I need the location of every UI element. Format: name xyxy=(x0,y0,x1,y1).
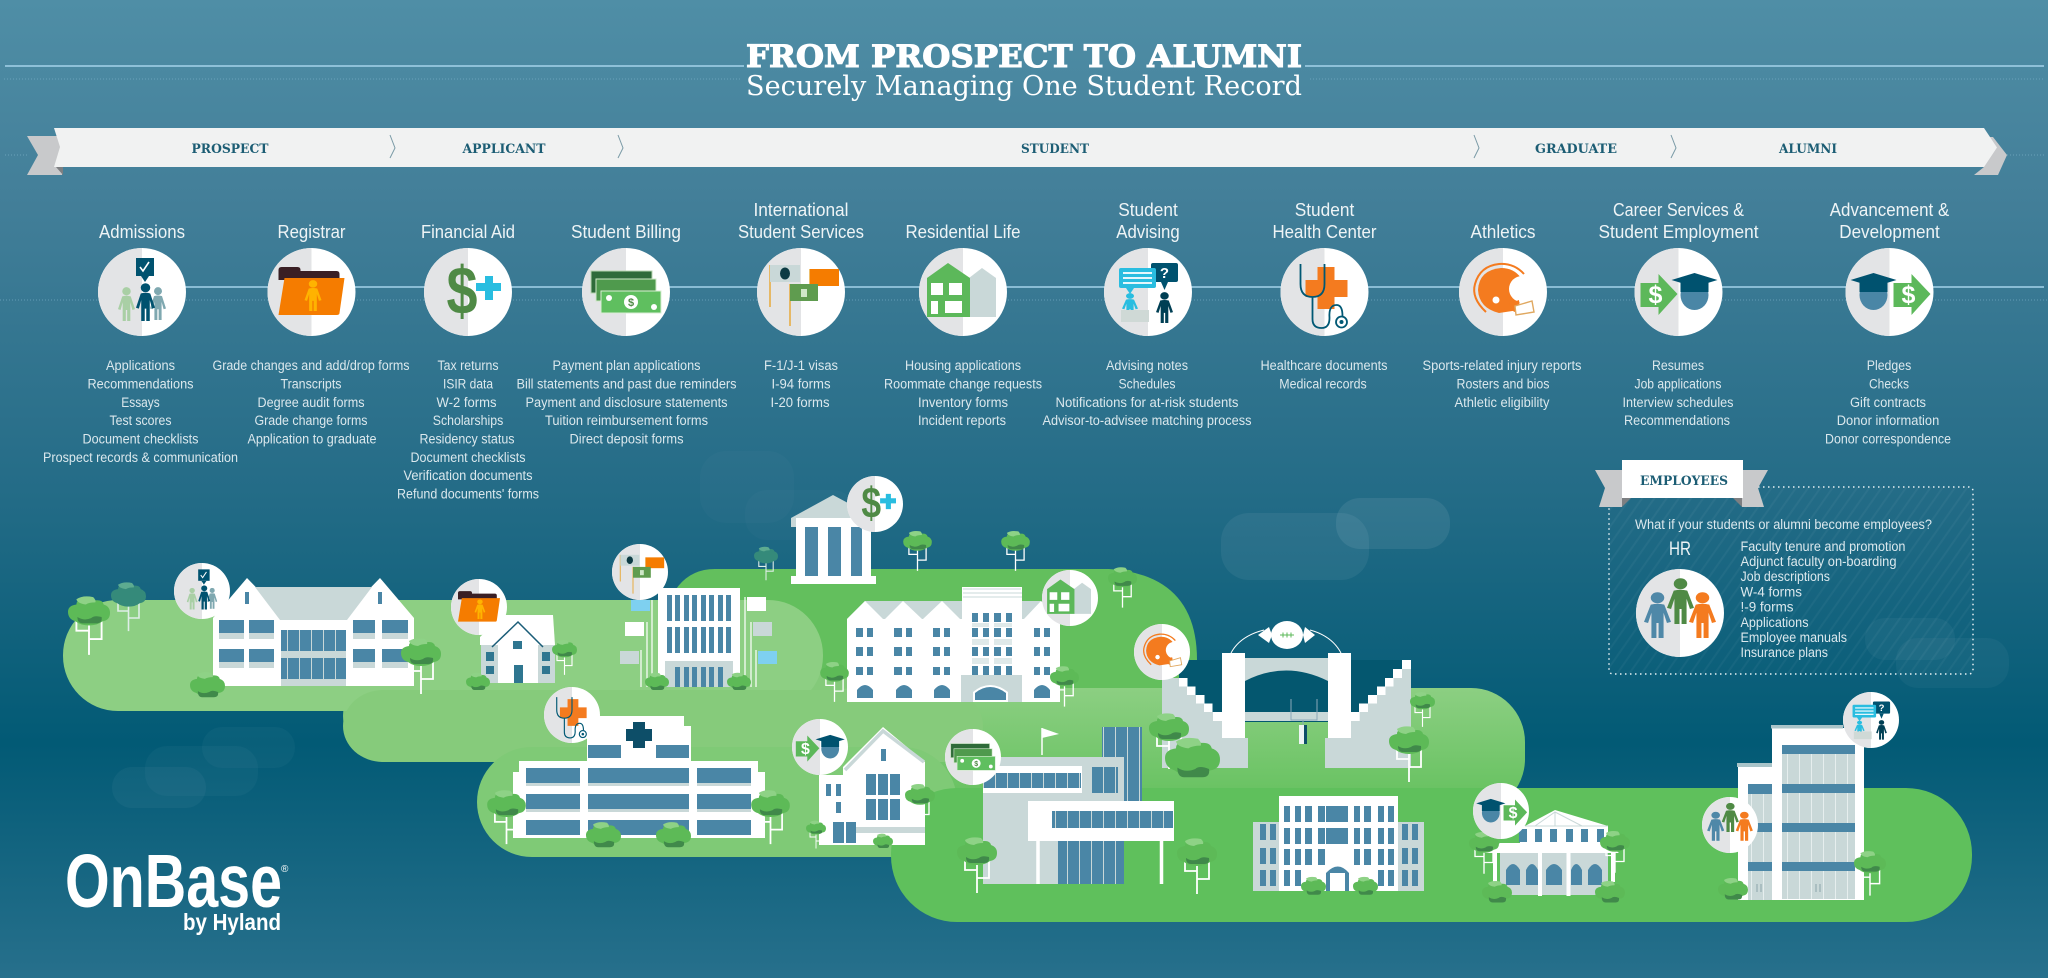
logo: ® xyxy=(281,864,289,875)
clouds xyxy=(112,451,2009,808)
column: Student Advising: Student xyxy=(1118,199,1178,220)
lifecycle ribbon: PROSPECT xyxy=(192,142,269,157)
column: Advancement and Development: Development xyxy=(1839,221,1940,242)
column: Advancement and Development: Checks xyxy=(1869,376,1909,392)
trees xyxy=(68,531,1886,902)
column: Student Health Center: Health Center xyxy=(1272,221,1376,242)
employees panel: W-4 forms xyxy=(1740,584,1802,600)
campus ground xyxy=(63,569,1972,922)
column: Financial Aid: Refund documents' forms xyxy=(397,486,539,502)
column: Financial Aid: Verification documents xyxy=(404,468,533,483)
column: Student Advising: Schedules xyxy=(1118,376,1176,392)
map marker: advancement xyxy=(1473,783,1529,839)
map marker: athletics xyxy=(1134,624,1190,680)
column: Financial Aid: Document checklists xyxy=(410,450,526,465)
building: residential halls xyxy=(847,587,1060,702)
column: Student Advising: Advising xyxy=(1116,221,1180,242)
column: Career Services and Student Employment: Career Services & xyxy=(1613,199,1745,220)
lifecycle ribbon: STUDENT xyxy=(1021,142,1089,157)
map marker: financial aid xyxy=(847,476,903,532)
column: Financial Aid: Residency status xyxy=(420,432,515,446)
column: Student Billing: Payment plan applications xyxy=(552,358,701,373)
column: Admissions: Document checklists xyxy=(82,432,199,446)
column: International Student Services xyxy=(738,199,864,410)
lifecycle ribbon: ALUMNI xyxy=(1778,142,1837,157)
column: Residential Life: Residential Life xyxy=(906,221,1020,242)
column: Registrar: Transcripts xyxy=(280,376,342,392)
column: Student Health Center: Student xyxy=(1295,199,1354,220)
title rules xyxy=(0,66,2048,300)
column: Student Advising xyxy=(1042,199,1252,428)
map marker: student advising xyxy=(1843,692,1899,748)
column: Student Billing: Bill statements and past due reminders xyxy=(516,376,737,392)
column: International Student Services: I-20 forms xyxy=(770,395,830,410)
title: FROM PROSPECT TO ALUMNI xyxy=(746,39,1302,75)
map marker: admissions xyxy=(174,563,230,619)
column: Advancement and Development: Gift contracts xyxy=(1850,395,1926,410)
column: Student Billing: Direct deposit forms xyxy=(570,432,684,446)
map marker: registrar xyxy=(451,579,507,635)
column: Athletics xyxy=(1422,221,1582,410)
column: Registrar: Application to graduate xyxy=(248,432,376,446)
column: Financial Aid: ISIR data xyxy=(443,376,493,392)
column: Advancement and Development: Pledges xyxy=(1867,358,1911,373)
column: Student Advising: Notifications for at-risk students xyxy=(1056,395,1239,410)
column: Career Services and Student Employment: Recommendations xyxy=(1624,413,1730,428)
column: Financial Aid: Scholarships xyxy=(433,413,503,428)
employees panel: EMPLOYEES xyxy=(1640,474,1728,489)
logo: OnBase xyxy=(65,839,282,923)
building: career services house xyxy=(819,727,925,845)
lifecycle ribbon xyxy=(27,128,2007,175)
column: Financial Aid: Tax returns xyxy=(438,358,499,373)
column: Student Health Center: Medical records xyxy=(1279,376,1367,392)
column: Career Services and Student Employment: Interview schedules xyxy=(1622,395,1734,410)
column: International Student Services: Student Services xyxy=(738,221,864,242)
map marker: student billing xyxy=(945,729,1001,785)
column: Athletics: Rosters and bios xyxy=(1456,376,1550,392)
column: Career Services and Student Employment: Student Employment xyxy=(1598,221,1758,242)
column: International Student Services: I-94 forms xyxy=(772,376,831,392)
connector line xyxy=(142,286,2044,288)
column: Registrar: Registrar xyxy=(278,221,346,242)
column: Student Billing: Payment and disclosure statements xyxy=(526,395,728,410)
column: Admissions: Test scores xyxy=(110,413,172,428)
building: international tower with flags xyxy=(620,588,777,687)
column: Residential Life: Incident reports xyxy=(918,413,1006,428)
column: Advancement and Development xyxy=(1825,199,1951,446)
column: Residential Life: Inventory forms xyxy=(918,395,1008,410)
column: Admissions: Admissions xyxy=(99,221,185,242)
column: Financial Aid xyxy=(397,221,539,502)
building: hospital xyxy=(513,716,765,838)
employees panel: Faculty tenure and promotion xyxy=(1740,539,1906,554)
building: employee tower xyxy=(1737,725,1864,900)
column: Student Billing xyxy=(516,221,737,446)
employees panel: Adjunct faculty on-boarding xyxy=(1740,554,1896,569)
title xyxy=(746,39,1302,102)
column: Registrar: Grade change forms xyxy=(254,413,368,428)
column: Career Services and Student Employment: Resumes xyxy=(1652,358,1704,373)
column: Athletics: Athletic eligibility xyxy=(1454,395,1550,410)
column: International Student Services: F-1/J-1 visas xyxy=(764,358,838,373)
column: Student Billing: Student Billing xyxy=(571,221,681,242)
column: Advancement and Development: Advancement & xyxy=(1830,199,1950,220)
map marker: health center xyxy=(544,687,600,743)
column: Admissions xyxy=(43,221,238,465)
employees panel: Employee manuals xyxy=(1740,630,1847,645)
column: Student Health Center xyxy=(1260,199,1388,392)
building: student billing complex xyxy=(983,727,1174,884)
column: Residential Life: Housing applications xyxy=(905,358,1021,373)
lifecycle ribbon: GRADUATE xyxy=(1535,142,1617,157)
map marker: residential life xyxy=(1042,570,1098,626)
column: Admissions: Applications xyxy=(106,358,175,373)
building: stadium xyxy=(1162,653,1411,768)
column: Student Advising: Advising notes xyxy=(1106,358,1188,373)
title: Securely Managing One Student Record xyxy=(746,71,1302,102)
column: International Student Services: International xyxy=(754,199,848,220)
column: Career Services and Student Employment xyxy=(1598,199,1758,428)
map marker: HR xyxy=(1702,797,1758,853)
column: Athletics: Athletics xyxy=(1470,221,1536,242)
building: center hall xyxy=(1253,796,1424,891)
column: Residential Life: Roommate change requests xyxy=(884,376,1042,392)
column: Admissions: Essays xyxy=(121,395,160,410)
building: columned hall xyxy=(791,495,876,584)
column: Advancement and Development: Donor information xyxy=(1837,413,1939,428)
column: Residential Life xyxy=(884,221,1042,428)
column: Athletics: Sports-related injury reports xyxy=(1422,358,1582,373)
employees panel xyxy=(1595,460,1973,674)
employees panel: What if your students or alumni become employees? xyxy=(1635,517,1932,532)
building: admissions hall xyxy=(213,578,414,686)
column: Advancement and Development: Donor correspondence xyxy=(1825,432,1951,446)
column: Registrar: Grade changes and add/drop forms xyxy=(212,358,410,373)
employees panel: Insurance plans xyxy=(1740,645,1828,660)
column: Admissions: Prospect records & communication xyxy=(43,450,238,465)
logo: by Hyland xyxy=(183,909,281,935)
building: advancement villa xyxy=(1485,810,1619,896)
lifecycle ribbon: APPLICANT xyxy=(462,142,546,157)
employees panel: Job descriptions xyxy=(1740,569,1830,584)
column: Admissions: Recommendations xyxy=(88,376,194,392)
column: Registrar xyxy=(212,221,410,446)
building: registrar house xyxy=(480,615,555,683)
column: Financial Aid: Financial Aid xyxy=(421,221,515,242)
column: Registrar: Degree audit forms xyxy=(258,395,365,410)
column: Career Services and Student Employment: Job applications xyxy=(1634,376,1722,392)
employees panel: Applications xyxy=(1740,615,1809,630)
employees panel: !-9 forms xyxy=(1740,600,1794,614)
map marker: career services xyxy=(792,719,848,775)
map marker: international xyxy=(612,544,668,600)
column: Student Advising: Advisor-to-advisee matching process xyxy=(1042,413,1252,428)
football goal arc xyxy=(1231,621,1341,653)
column: Financial Aid: W-2 forms xyxy=(436,395,497,410)
column: Student Billing: Tuition reimbursement forms xyxy=(545,413,708,428)
column: Student Health Center: Healthcare documents xyxy=(1260,358,1388,373)
employees panel: HR xyxy=(1669,539,1691,560)
